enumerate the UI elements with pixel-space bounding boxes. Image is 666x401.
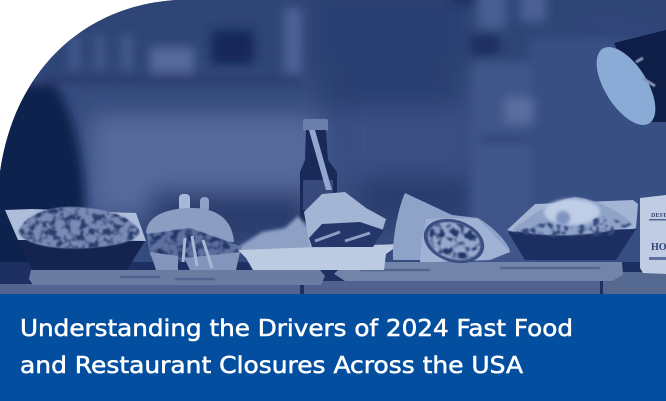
photo: blue-toned food on a counter <box>0 0 666 294</box>
title text: and Restaurant Closures Across the USA <box>20 351 523 379</box>
blurred restaurant background <box>0 0 666 262</box>
plate of fries <box>238 216 400 270</box>
hot sauce bottle <box>300 119 337 222</box>
sandwich on plate <box>304 192 386 248</box>
right food tray <box>507 197 638 260</box>
burger <box>146 194 240 270</box>
title text: Understanding the Drivers of 2024 Fast Food <box>20 314 573 342</box>
left food tray <box>5 207 146 270</box>
title band <box>0 294 666 401</box>
cut wrap <box>393 193 510 271</box>
mug with printed label <box>640 195 666 274</box>
table and wooden boards <box>0 262 666 294</box>
desk lamp <box>596 30 666 125</box>
